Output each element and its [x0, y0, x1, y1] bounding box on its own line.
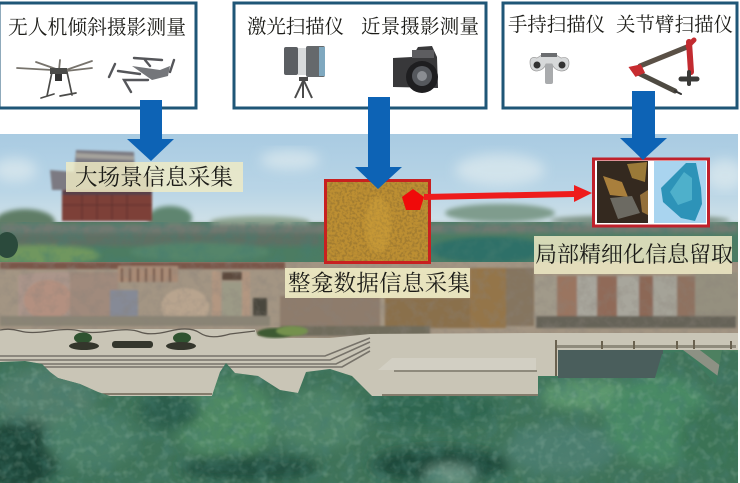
- clouds: [0, 150, 740, 191]
- arrow: scanner to niche: [355, 97, 402, 189]
- front railing: [102, 394, 538, 398]
- icon: articulated arm: [631, 40, 697, 94]
- icon: laser scanner: [284, 46, 325, 98]
- foreground forest: [0, 345, 740, 483]
- heading: laser scanner: 激光扫描仪: [247, 16, 344, 38]
- planters: [69, 332, 196, 350]
- sky: [0, 134, 738, 229]
- model: blue 3D mesh: [654, 161, 706, 223]
- heading: close-range photogrammetry: 近景摄影测量: [361, 16, 479, 38]
- local detail images: [594, 159, 708, 226]
- arrow: UAV to large scene: [127, 100, 174, 161]
- icon: folding drone: [109, 58, 174, 92]
- marker: red pentagon: [402, 189, 424, 210]
- icon: hexacopter drone: [17, 60, 92, 98]
- label: local detail capture: 局部精细化信息留取: [535, 242, 733, 267]
- right retaining wall and railing: [556, 340, 738, 382]
- arrow: handheld to local detail: [620, 91, 667, 160]
- panel: handheld and articulated-arm scanners: [503, 3, 737, 108]
- heading: UAV: 无人机倾斜摄影测量: [8, 17, 186, 39]
- hillside vegetation: [0, 204, 738, 268]
- heading: articulated-arm scanner: 关节臂扫描仪: [616, 13, 733, 36]
- arrow: red niche to detail: [424, 185, 592, 202]
- cliff with carvings: [0, 262, 738, 340]
- photo: carved detail: [597, 161, 648, 223]
- panel: site panorama: [0, 134, 740, 483]
- panel: UAV oblique photogrammetry: [0, 3, 196, 108]
- label: local detail capture: [534, 236, 733, 274]
- panel: laser scanner and close-range photogrammetry: [234, 3, 486, 108]
- right edge gutter: [738, 134, 740, 483]
- label: large scene: 大场景信息采集: [75, 165, 233, 190]
- heading: handheld scanner: 手持扫描仪: [508, 14, 605, 36]
- terrace: [0, 326, 738, 398]
- base ground behind terrace: [0, 330, 738, 483]
- icon: camera: [393, 46, 438, 93]
- niche image: full niche scan: [326, 180, 430, 262]
- icon: handheld scanner: [530, 53, 569, 84]
- label: full niche data: 整龛数据信息采集: [288, 271, 470, 296]
- temple pavilion: [50, 150, 152, 221]
